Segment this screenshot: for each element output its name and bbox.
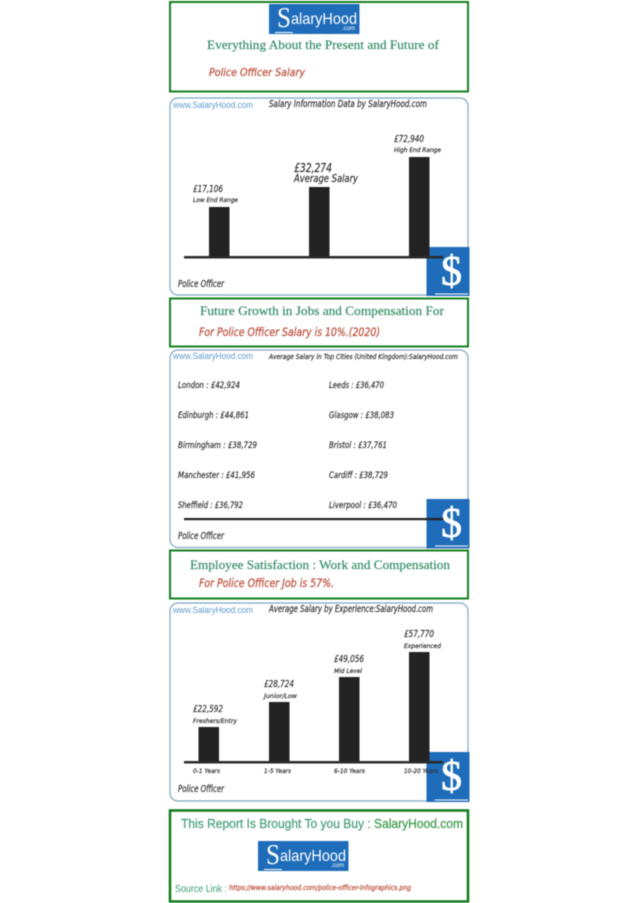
bar: 1-5 years: Junior/Low xyxy=(262,692,298,700)
header title: Everything About the Present and Future of xyxy=(207,37,440,52)
header subtitle: Police Officer Salary xyxy=(209,66,305,79)
bar: average: Average Salary xyxy=(293,172,358,185)
site url: www.SalaryHood.com xyxy=(172,351,253,361)
source link url: https://www.salaryhood.com/police-officer-infographics.png xyxy=(229,884,411,892)
city list: Birmingham : £38,729 xyxy=(178,441,257,451)
panel: salary range chart xyxy=(170,98,470,296)
city list: Glasgow : £38,083 xyxy=(329,411,394,421)
bar: low end: £17,106 xyxy=(193,184,223,195)
growth title: Future Growth in Jobs and Compensation For xyxy=(200,303,445,318)
bar: average: £32,274 xyxy=(294,160,332,175)
panel: top cities xyxy=(170,350,470,548)
panel: salary by experience chart xyxy=(170,603,470,802)
source link label: Source Link : xyxy=(175,884,227,895)
panel: footer xyxy=(170,810,468,902)
bar: 6-10 years xyxy=(334,654,366,775)
logo: SalaryHood: alaryHood xyxy=(291,11,357,28)
bar: 6-10 years: 6-10 Years xyxy=(334,767,366,775)
bar: 6-10 years: Mid Level xyxy=(334,667,362,675)
site url: www.SalaryHood.com xyxy=(172,100,253,110)
icon: dollar: $ xyxy=(441,249,462,295)
bar: 0-1 years: 0-1 Years xyxy=(193,767,221,775)
city list: London : £42,924 xyxy=(178,381,240,391)
icon: dollar xyxy=(426,499,470,548)
icon: dollar xyxy=(426,752,470,802)
chart title: Average Salary by Experience:SalaryHood.com xyxy=(268,604,433,615)
axis xyxy=(184,256,443,258)
cities title: Average Salary in Top Cities (United Kingdom):SalaryHood.com xyxy=(268,353,458,361)
footer title: This Report Is Brought To you Buy : SalaryHood.com xyxy=(181,816,463,831)
logo: SalaryHood: .com xyxy=(342,26,355,32)
bar: 0-1 years: £22,592 xyxy=(193,704,223,715)
satisfaction value: For Police Officer Job is 57%. xyxy=(199,576,334,590)
bar: high end: £72,940 xyxy=(394,134,424,145)
icon: dollar: $ xyxy=(441,754,462,800)
city list: Manchester : £41,956 xyxy=(178,471,255,481)
city list: Sheffield : £36,792 xyxy=(178,501,243,511)
label: police officer: Police Officer xyxy=(178,531,225,542)
bar: average xyxy=(293,160,358,257)
bar: 6-10 years: £49,056 xyxy=(334,654,364,665)
bar: low end: Low End Range xyxy=(193,196,238,204)
panel: employee satisfaction xyxy=(170,550,468,598)
satisfaction title: Employee Satisfaction : Work and Compensation xyxy=(190,557,451,572)
bar: 0-1 years: Freshers/Entry xyxy=(193,717,237,725)
city list: Cardiff : £38,729 xyxy=(329,471,388,481)
bar: low end xyxy=(193,184,238,257)
city list: Liverpool : £36,470 xyxy=(329,501,397,511)
bar: 1-5 years: £28,724 xyxy=(264,679,294,690)
city list xyxy=(178,381,397,511)
header panel xyxy=(170,2,468,92)
growth value: For Police Officer Salary is 10%.(2020) xyxy=(199,325,380,339)
bar: 10-20 years: £57,770 xyxy=(404,629,434,640)
bar: 1-5 years xyxy=(262,679,298,775)
chart title: Salary Information Data by SalaryHood.com xyxy=(269,99,427,110)
city list: Leeds : £36,470 xyxy=(329,381,384,391)
icon: dollar xyxy=(426,247,470,296)
bar: 1-5 years: 1-5 Years xyxy=(264,767,292,775)
bar: 10-20 years xyxy=(404,629,442,775)
bar: 10-20 years: 10-20 Years xyxy=(404,767,439,775)
site url: www.SalaryHood.com xyxy=(172,605,253,615)
label: police officer: Police Officer xyxy=(178,279,225,290)
city list: Edinburgh : £44,861 xyxy=(178,411,249,421)
bar: high end: High End Range xyxy=(394,146,441,154)
label: police officer: Police Officer xyxy=(178,784,225,795)
bar: 10-20 years: Experienced xyxy=(404,642,442,650)
logo: SalaryHood xyxy=(269,2,360,34)
axis xyxy=(184,761,443,764)
panel: future growth xyxy=(170,298,468,346)
logo: SalaryHood: S xyxy=(266,839,280,871)
divider line xyxy=(184,518,443,520)
city list: Bristol : £37,761 xyxy=(329,441,387,451)
logo: SalaryHood: alaryHood xyxy=(280,848,346,865)
logo: SalaryHood xyxy=(258,839,348,871)
logo: SalaryHood: .com xyxy=(331,863,344,869)
bar: high end xyxy=(394,134,441,257)
bar: 0-1 years xyxy=(193,704,237,775)
logo: SalaryHood: S xyxy=(277,2,291,34)
icon: dollar: $ xyxy=(441,501,462,547)
